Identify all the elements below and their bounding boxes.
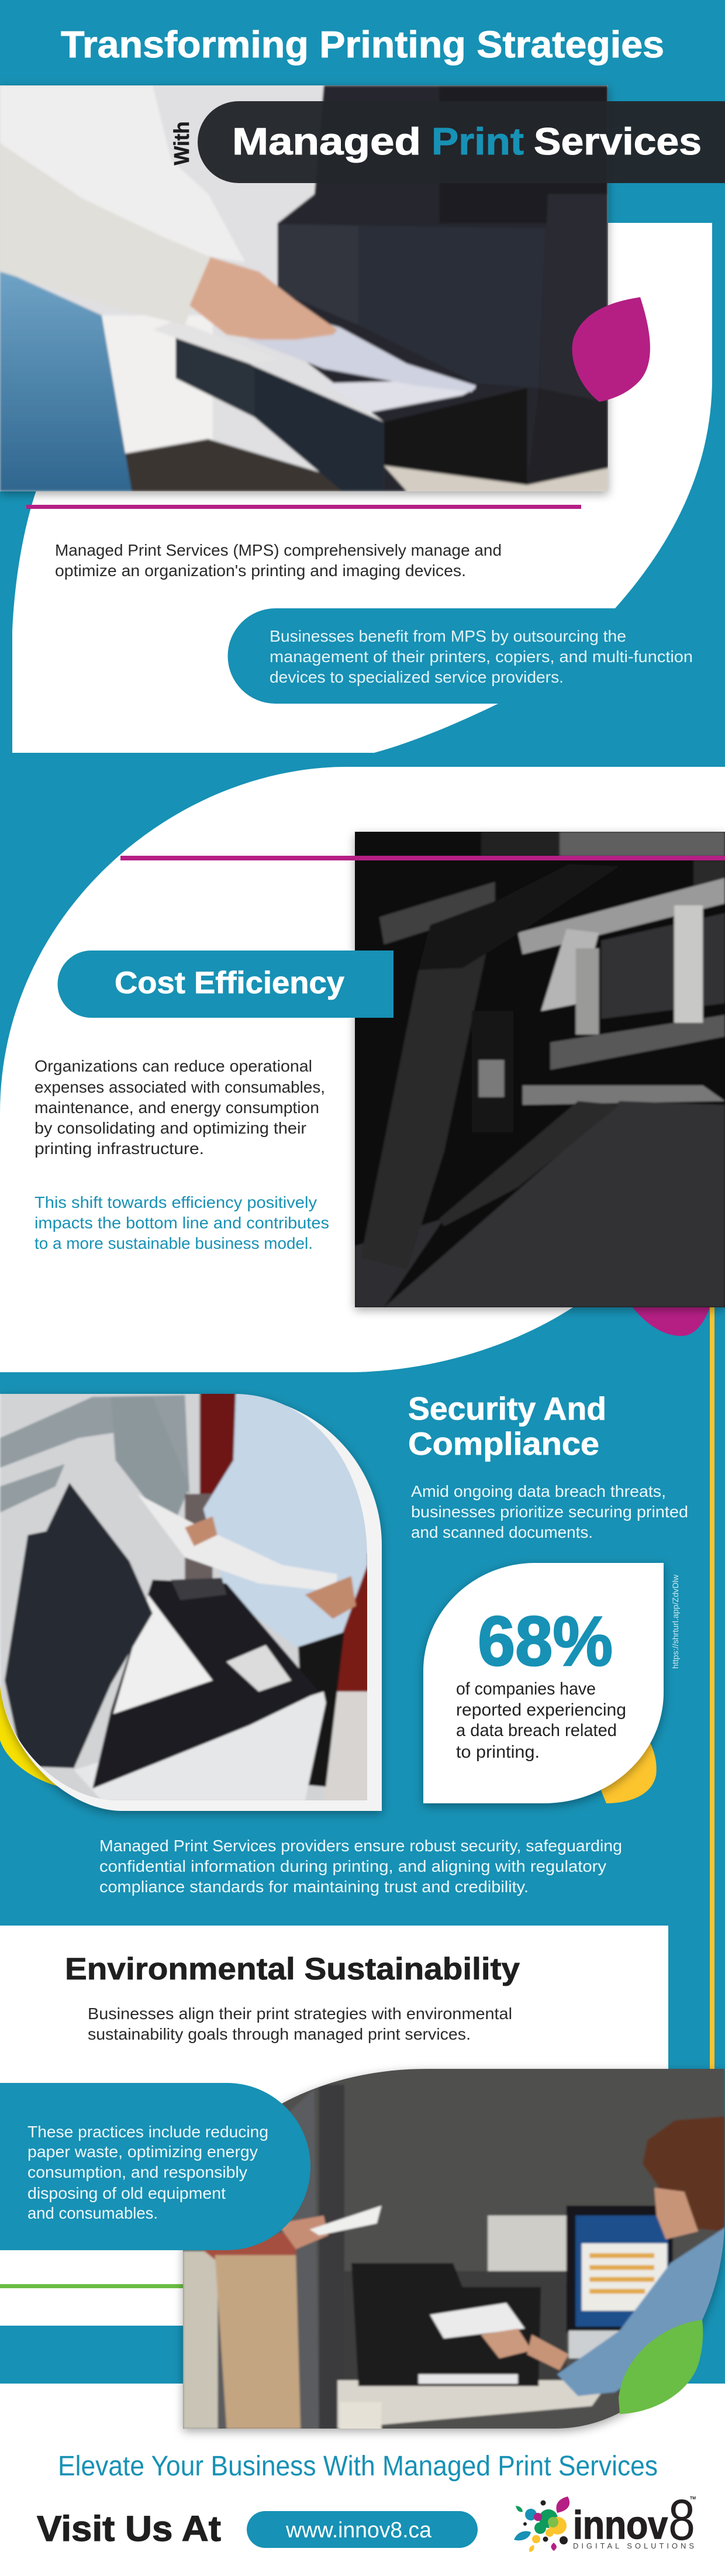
magenta divider line [120,856,725,860]
source url: https://shrturl.app/ZdvDlw [671,1574,680,1669]
logo: innov8: 8 [668,2488,695,2552]
photo: hand loading paper into printer [0,85,608,491]
subtitle: Managed Print Services: Managed [232,120,421,163]
teal callout pill [228,608,725,704]
yellow leaf [601,1743,657,1803]
yellow blob [0,1680,94,1790]
heading: Compliance [408,1425,599,1462]
heading: Environmental Sustainability [65,1952,520,1986]
subtitle: Managed Print Services: Services [534,120,702,163]
panel text: paper waste, optimizing energy [27,2143,258,2161]
visit label: Visit Us At [37,2509,221,2549]
intro text: sustainability goals through managed print services. [88,2025,471,2043]
bottom white area [0,2384,725,2576]
magenta divider line [26,505,581,509]
dark title bar [198,101,725,183]
body text: Managed Print Services providers ensure robust security, safeguarding [99,1837,622,1855]
photo: man at copier [0,1390,382,1812]
panel text: These practices include reducing [27,2123,268,2141]
title: Transforming Printing Strategies [61,23,664,66]
subtitle: Managed Print Services [232,120,702,163]
callout text: Businesses benefit from MPS by outsourcing the [270,627,626,645]
logo: innov8 [514,2488,696,2552]
intro text: businesses prioritize securing printed [411,1503,688,1521]
stat text: a data breach related [456,1721,617,1740]
intro text: and scanned documents. [411,1523,593,1541]
call to action: Elevate Your Business With Managed Print Services [58,2451,658,2482]
panel: security and compliance [0,1390,693,1896]
subtitle: Managed Print Services: Print [431,120,524,163]
panel text: disposing of old equipment [27,2184,226,2202]
heading: Security And [408,1390,606,1427]
url pill [247,2511,478,2548]
body text: printing infrastructure. [34,1139,204,1158]
body text: maintenance, and energy consumption [34,1098,319,1117]
stat number: 68% [478,1602,613,1680]
logo: innov8: TM [690,2496,696,2501]
panel: environmental sustainability [0,1926,725,2576]
subtitle word: With: With [170,122,194,165]
green leaf [619,2320,703,2414]
teal text: to a more sustainable business model. [34,1234,313,1252]
photo: woman using printer [180,2065,725,2430]
intro text: Amid ongoing data breach threats, [411,1482,666,1500]
panel text: consumption, and responsibly [27,2163,247,2181]
panel text: and consumables. [27,2204,158,2222]
body text: expenses associated with consumables, [34,1078,325,1096]
body text: Organizations can reduce operational [34,1057,312,1075]
photo frame [0,1394,382,1811]
footer [37,2451,696,2552]
body text: compliance standards for maintaining trust and credibility. [99,1878,529,1896]
teal rounded panel [0,2083,310,2250]
yellow vertical line [710,1307,714,2069]
panel: introduction [0,85,725,753]
white curved background [12,223,712,753]
stat text: of companies have [456,1679,596,1699]
body text: confidential information during printing, and aligning with regulatory [99,1857,606,1875]
body text: by consolidating and optimizing their [34,1119,306,1137]
green line [0,2284,187,2288]
white background [0,1926,668,2326]
intro text: Businesses align their print strategies with environmental [88,2005,512,2023]
stat text: to printing. [456,1742,540,1762]
callout text: devices to specialized service providers. [270,668,564,686]
intro text: Managed Print Services (MPS) comprehensively manage and [55,541,502,559]
photo: printer mechanism [355,832,725,1307]
callout text: management of their printers, copiers, and multi-function [270,648,693,666]
intro text: optimize an organization's printing and imaging devices. [55,562,466,580]
panel: cost efficiency [0,767,725,1372]
logo: innov8: DIGITAL SOLUTIONS [573,2541,694,2550]
stat card [423,1563,664,1803]
white curved background [0,767,725,1372]
heading pill [57,950,393,1018]
magenta leaf [572,297,650,402]
heading: Cost Efficiency [115,966,345,1000]
magenta blob [633,1307,710,1336]
stat text: reported experiencing [456,1700,626,1720]
logo: innov8: innov [573,2503,668,2547]
teal text: impacts the bottom line and contributes [34,1214,329,1232]
url text: www.innov8.ca [285,2518,432,2543]
teal text: This shift towards efficiency positively [34,1193,317,1211]
